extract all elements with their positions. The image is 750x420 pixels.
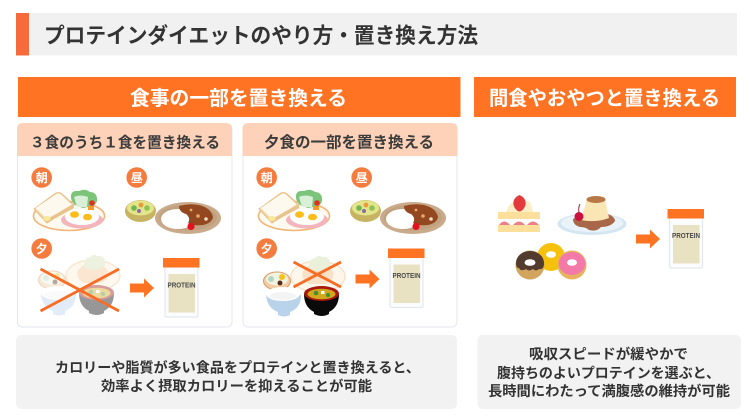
text box: right explanation: [478, 335, 741, 409]
badge: evening: [31, 238, 52, 259]
subheading: part of dinner: 夕食の一部を置き換える: [264, 132, 434, 152]
text box: left explanation: カロリーや脂質が多い食品をプロテインと置き換えると、: [55, 360, 420, 376]
badge: morning: [31, 167, 52, 188]
arrow: [636, 230, 660, 248]
panel: replace part of dinner: [242, 123, 458, 327]
protein shaker: PROTEIN: [168, 280, 196, 290]
illustration: dinner with main dish crossed out: [264, 256, 345, 316]
badge: morning: 朝: [36, 170, 48, 185]
heading: replace part of meals: 食事の一部を置き換える: [130, 87, 347, 110]
protein shaker: PROTEIN: [672, 231, 700, 240]
badge: noon: 昼: [356, 171, 368, 185]
badge: noon: 昼: [131, 171, 143, 185]
illustration: breakfast plate: [34, 190, 104, 230]
arrow: [356, 270, 380, 288]
badge: noon: [126, 167, 147, 188]
illustration: breakfast plate: [258, 190, 330, 230]
badge: evening: 夕: [36, 241, 48, 256]
heading: replace part of meals: [18, 77, 460, 117]
subheading: one of three meals: ３食のうち１食を置き換える: [30, 134, 220, 152]
text box: right explanation: 長時間にわたって満腹感の維持が可能: [488, 383, 730, 399]
title: プロテインダイエットのやり方・置き換え方法: [44, 23, 478, 48]
protein shaker: PROTEIN: [392, 271, 420, 280]
text box: left explanation: [16, 335, 457, 409]
text box: right explanation: 腹持ちのよいプロテインを選ぶと、: [497, 365, 720, 381]
arrow: [130, 278, 154, 298]
illustration: salad and curry: [350, 200, 446, 234]
text box: right explanation: 吸収スピードが緩やかで: [529, 346, 688, 362]
icon: strawberry cake: [498, 195, 540, 232]
badge: morning: [256, 167, 277, 188]
panel: replace one of three meals: [17, 123, 232, 327]
badge: noon: [351, 167, 372, 188]
illustration: crossed-out dinner: [38, 255, 120, 316]
illustration: salad and curry: [125, 200, 221, 234]
title bar: [16, 13, 737, 56]
illustration: snacks: [498, 195, 626, 280]
badge: evening: [256, 238, 277, 259]
protein shaker: [388, 248, 424, 308]
badge: evening: 夕: [261, 241, 273, 256]
protein shaker: [668, 209, 704, 268]
text box: left explanation: 効率よく摂取カロリーを抑えることが可能: [101, 378, 372, 394]
icon: donuts: [516, 243, 586, 280]
badge: morning: 朝: [261, 170, 273, 185]
heading: replace snacks: 間食やおやつと置き換える: [489, 87, 720, 110]
heading: replace snacks: [474, 77, 736, 117]
icon: custard pudding: [558, 196, 626, 235]
protein shaker: [163, 258, 200, 317]
